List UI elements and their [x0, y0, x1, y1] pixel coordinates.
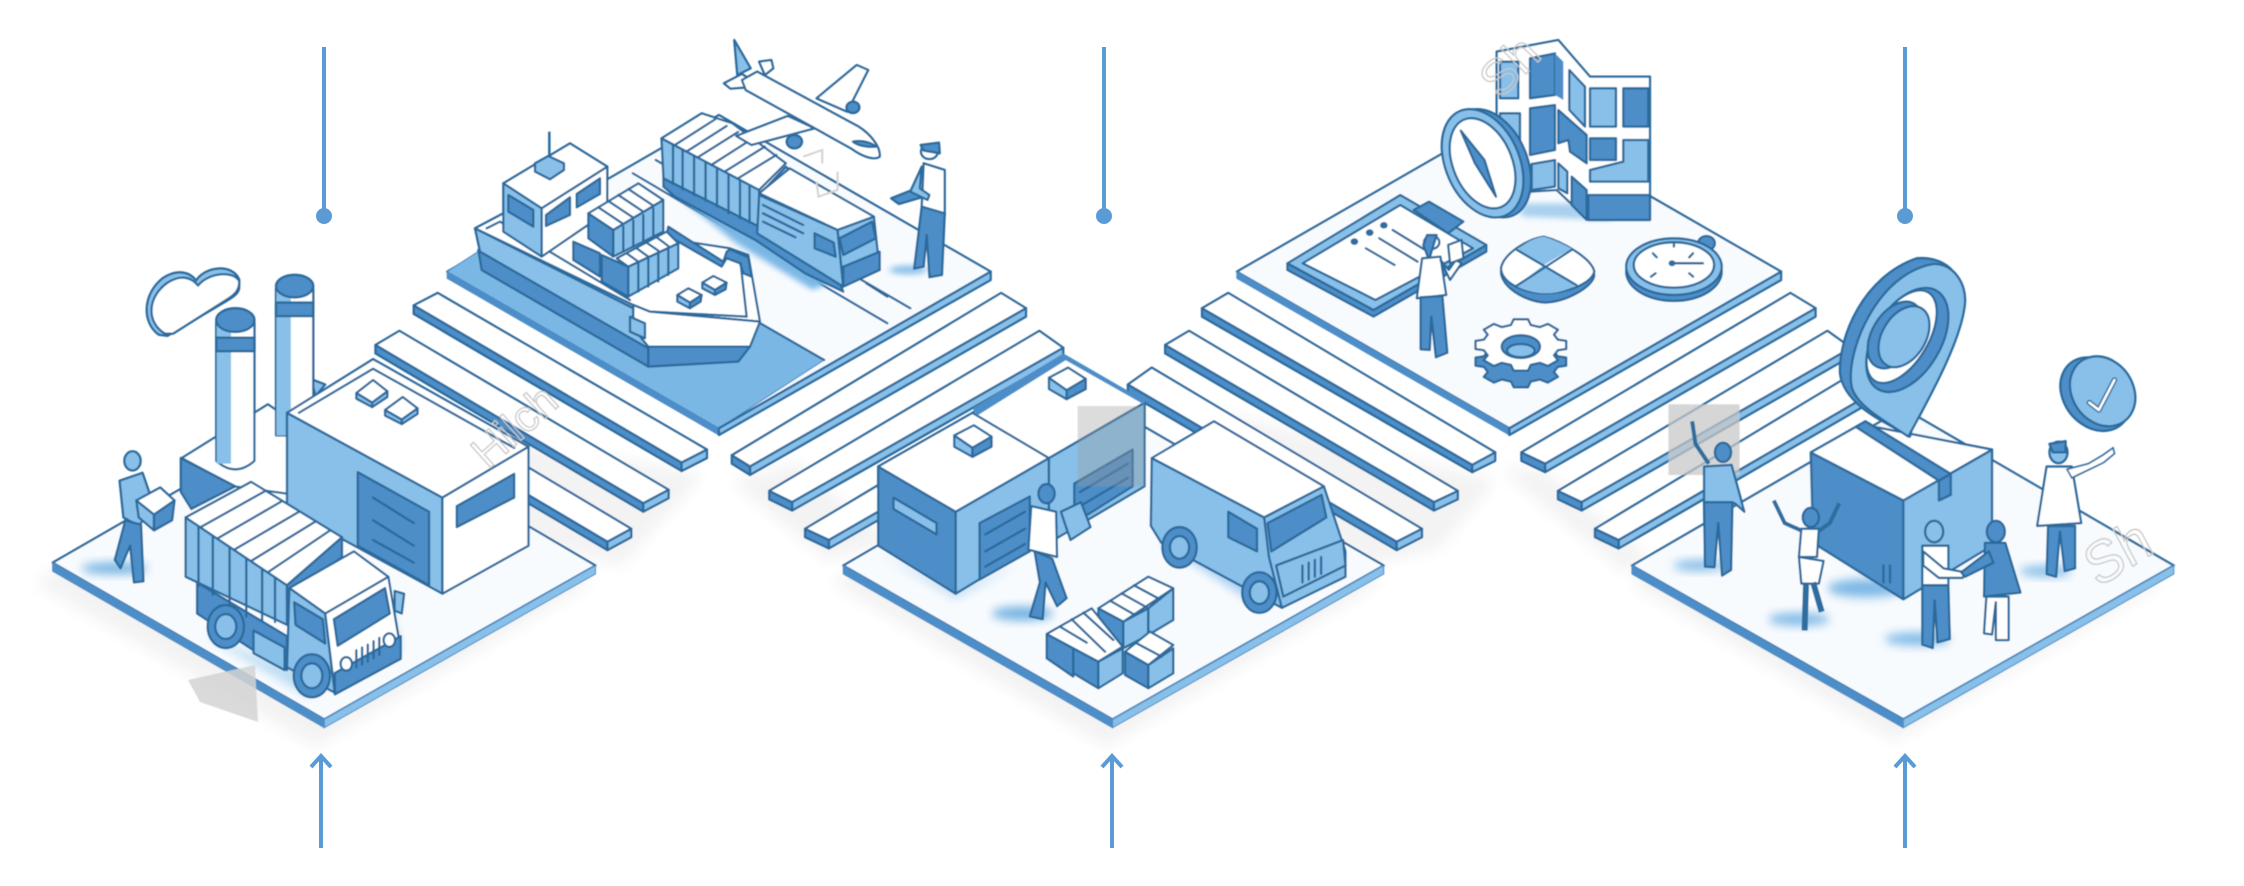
panel: delivery	[1628, 408, 2174, 741]
person shaking hands	[1922, 521, 1965, 648]
arrow 3	[1895, 756, 1915, 848]
panel: planning	[1237, 115, 1781, 435]
platform: port	[447, 115, 991, 435]
strips: between warehouse and planning	[1128, 293, 1496, 566]
person waving	[1692, 421, 1744, 576]
icon: chimney right	[276, 275, 313, 435]
watermark: delivery: Sh	[2073, 506, 2162, 600]
panel: factory	[33, 268, 595, 746]
person gesturing	[2037, 441, 2114, 577]
strips: between port and warehouse	[731, 293, 1099, 560]
ship	[475, 132, 760, 367]
icon: cloud	[147, 268, 239, 336]
person with clipboard	[891, 143, 945, 277]
person carrying box	[115, 451, 175, 582]
icon: location pin	[1840, 258, 1965, 437]
watermark: map: Sh	[1468, 25, 1551, 108]
factory base	[181, 379, 330, 509]
watermark block: warehouse	[1078, 406, 1145, 486]
icon: delivery van	[1151, 421, 1345, 613]
watermark block: delivery	[1668, 404, 1740, 475]
arrow 1	[311, 756, 331, 848]
icon: chimney left	[216, 308, 254, 469]
panel: port and airport	[447, 40, 991, 435]
delivery objects	[1668, 343, 2162, 648]
truck: factory	[186, 482, 404, 697]
icons: planning objects	[1287, 100, 1722, 387]
callout stem 1	[316, 47, 332, 224]
illustration	[33, 25, 2174, 746]
platform: factory	[33, 406, 595, 746]
icon: pie shield	[1501, 237, 1594, 303]
watermark block: left	[188, 665, 258, 722]
icon: airplane	[724, 40, 880, 158]
person shaking hands: woman	[1961, 521, 2021, 640]
person carrying parcel	[1028, 484, 1091, 619]
strips: between factory and port	[335, 293, 707, 566]
platform: planning	[1237, 115, 1781, 435]
icon: big parcel	[1811, 421, 1992, 599]
arrow 2	[1102, 756, 1122, 848]
callout stem 3	[1897, 47, 1913, 224]
person cheering	[1774, 500, 1839, 631]
icon: stacked boxes	[1047, 577, 1173, 688]
person with tablet	[1417, 235, 1463, 357]
panel: warehouse	[831, 353, 1384, 746]
icon: compass	[1427, 100, 1546, 227]
watermark mark: port	[803, 150, 838, 197]
icon: gear	[1476, 319, 1566, 387]
platform: warehouse	[831, 408, 1384, 746]
truck: port	[662, 113, 880, 292]
icon: folded map	[1497, 40, 1650, 220]
icon: stopwatch	[1626, 236, 1722, 301]
icon: check badge	[2049, 343, 2146, 446]
platform: delivery	[1628, 408, 2174, 741]
callout stem 2	[1096, 47, 1112, 224]
watermark: left: Hilch	[462, 376, 567, 477]
factory building	[287, 359, 529, 594]
icon: clipboard	[1287, 195, 1486, 317]
strips: between planning and delivery	[1500, 293, 1887, 571]
warehouse building	[878, 353, 1145, 594]
